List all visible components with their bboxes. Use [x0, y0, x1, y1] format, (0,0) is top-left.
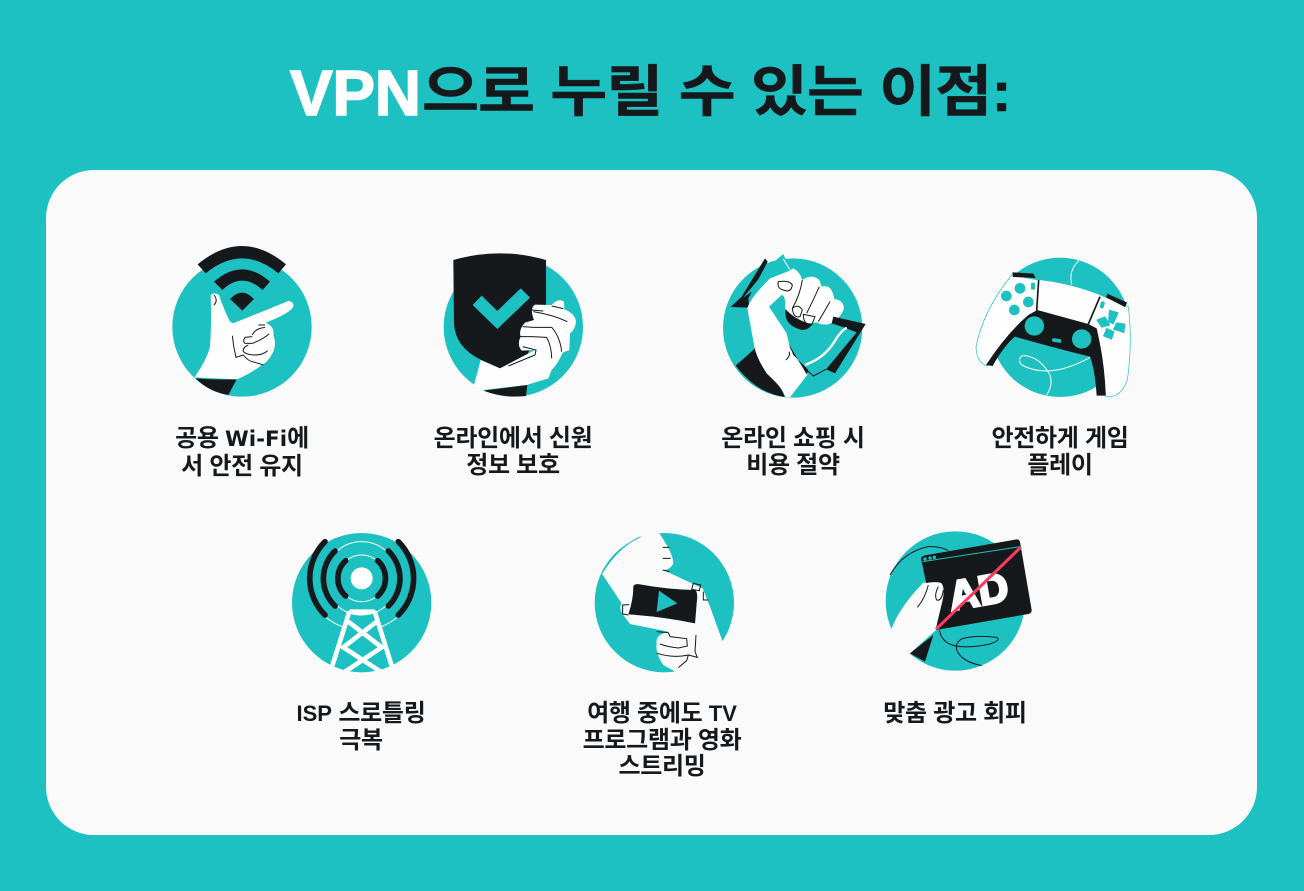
icon: game controller: [976, 258, 1130, 397]
icon: video streaming hands: [595, 532, 735, 673]
title: 으로 누릴 수 있는 이점:: [422, 62, 1011, 124]
label: streaming while travelling: [583, 700, 742, 780]
label: shopping savings: 온라인 쇼핑 시: [721, 425, 865, 452]
panel: benefits card: [46, 170, 1257, 835]
icon: ad blocking: AD: [945, 564, 1012, 619]
label: streaming while travelling: 프로그램과 영화: [583, 726, 741, 754]
label: safe gaming: [991, 425, 1129, 478]
label: ISP throttling: 극복: [339, 726, 383, 754]
label: streaming while travelling: 스트리밍: [618, 753, 706, 780]
label: ISP throttling: [297, 700, 425, 754]
label: shopping savings: [721, 425, 865, 478]
label: identity protection: 온라인에서 신원: [434, 425, 592, 452]
label: identity protection: [434, 425, 592, 478]
label: ISP throttling: ISP 스로틀링: [297, 700, 425, 727]
label: safe gaming: 플레이: [1027, 452, 1093, 478]
icon: ISP tower: [292, 533, 431, 672]
icon: wifi hand: [172, 246, 312, 397]
icon: ad blocking: [883, 531, 1032, 671]
label: public Wi-Fi: 서 안전 유지: [181, 452, 303, 480]
title: VPN: [290, 57, 421, 129]
label: safe gaming: 안전하게 게임: [991, 425, 1129, 452]
label: avoid targeted ads: 맞춤 광고 회피: [883, 700, 1027, 727]
label: shopping savings: 비용 절약: [746, 452, 840, 478]
icon: shield hand: [444, 253, 583, 397]
label: identity protection: 정보 보호: [466, 452, 560, 478]
label: public Wi-Fi: 공용 Wi-Fi에: [175, 425, 309, 452]
label: streaming while travelling: 여행 중에도 TV: [587, 700, 737, 727]
icon: shopping hand: [723, 254, 866, 398]
label: public Wi-Fi: [175, 425, 309, 480]
